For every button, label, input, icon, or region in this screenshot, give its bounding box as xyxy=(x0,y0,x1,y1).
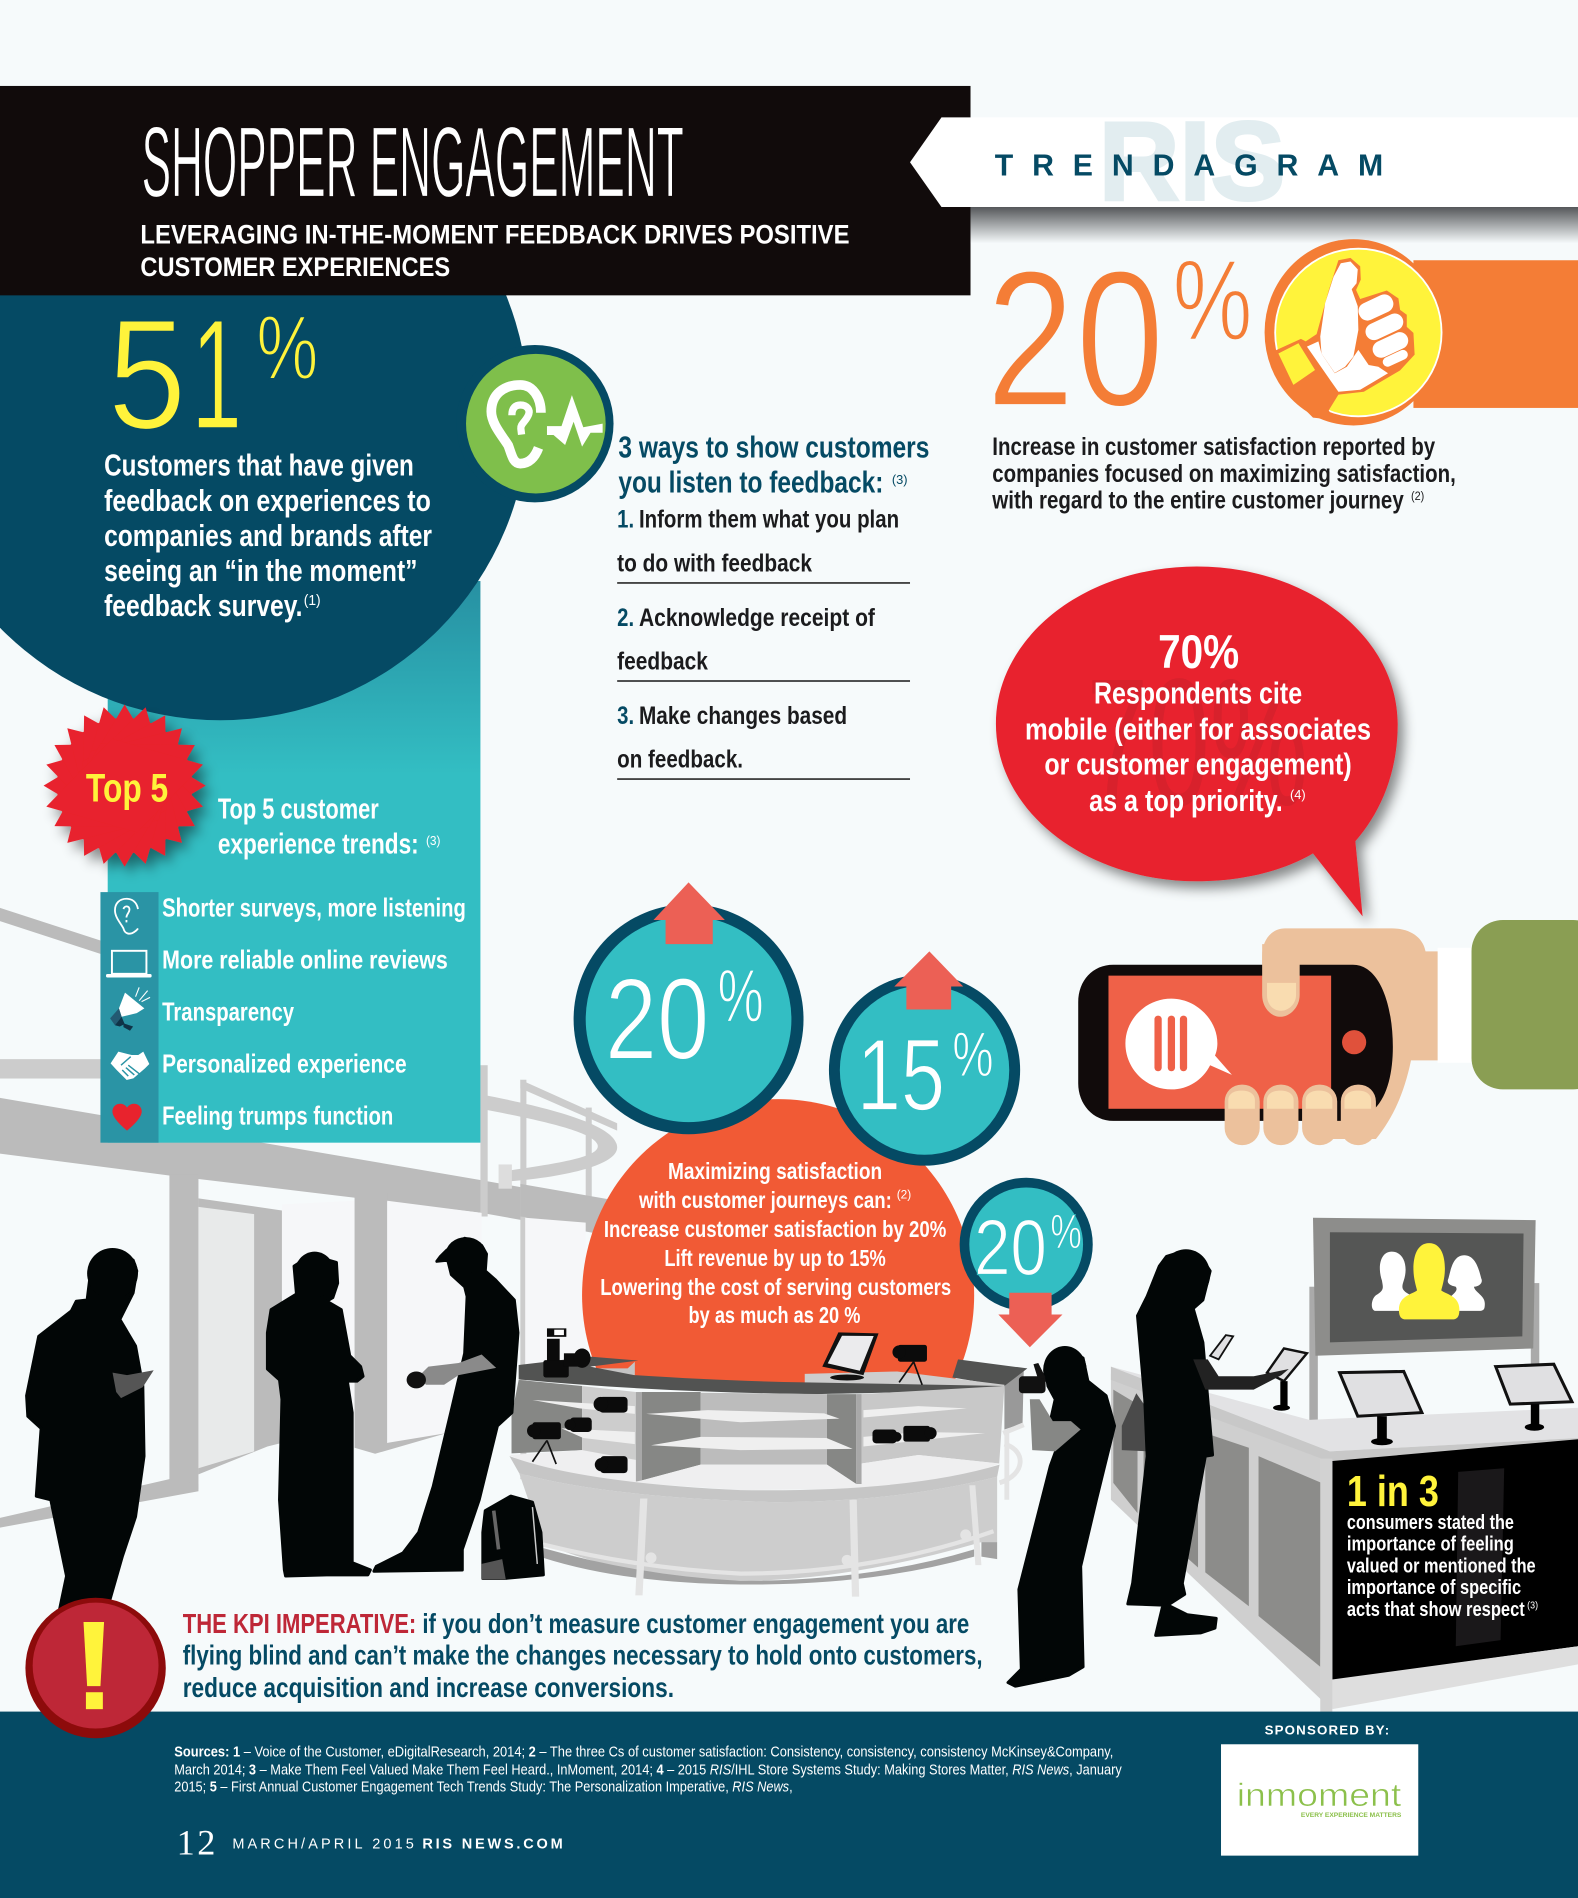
badge: top 5 starburst: Top 5 xyxy=(86,766,168,810)
sponsor xyxy=(1221,1723,1418,1856)
header: black title banner xyxy=(0,86,971,295)
panel: orange maximizing satisfaction: Increase customer satisfaction by 20% xyxy=(604,1216,946,1242)
thumb xyxy=(1262,944,1300,1017)
kiosk: tablet table with sign xyxy=(1111,1218,1578,1719)
icon: thumbs up xyxy=(1265,239,1442,425)
ribbon: trendagram xyxy=(910,99,1578,243)
panel: orange maximizing satisfaction: with customer journeys can: xyxy=(638,1187,892,1213)
silhouette: woman with tablet xyxy=(1122,1249,1289,1635)
panel: orange maximizing satisfaction: Lift revenue by up to 15% xyxy=(664,1245,886,1271)
sign: people icon xyxy=(1313,1218,1536,1356)
page number and date: 12 xyxy=(177,1822,215,1862)
panel: orange maximizing satisfaction: by as much as 20 % xyxy=(689,1302,860,1328)
text: 1 in 3: 1 in 3 xyxy=(1347,1468,1439,1516)
arrow: up xyxy=(894,951,963,1010)
heading: top 5 customer experience trends: experience trends: xyxy=(218,828,419,860)
stat circle: 20 percent down: % xyxy=(1050,1205,1082,1259)
text: 1 in 3 xyxy=(1347,1468,1538,1621)
stat circle: 20 percent down xyxy=(960,1178,1093,1347)
callout: red speech bubble 70 percent: (4) xyxy=(1290,787,1306,802)
text: increase in customer satisfaction: with regard to the entire customer journey xyxy=(991,486,1404,514)
subtitle: CUSTOMER EXPERIENCES xyxy=(140,252,450,282)
list item 2: feedback xyxy=(617,647,709,675)
panel: 51 percent circle xyxy=(0,103,529,720)
list: five trends: Feeling trumps function xyxy=(162,1101,393,1131)
silhouette: man in suit xyxy=(267,1252,370,1576)
stat circle: 20 percent up: 20 xyxy=(605,954,709,1084)
subtitle: LEVERAGING IN-THE-MOMENT FEEDBACK DRIVES POSITIVE xyxy=(140,219,850,249)
header: black title banner: SHOPPER ENGAGEMENT xyxy=(142,107,684,219)
silhouette: photographer xyxy=(1008,1346,1115,1686)
backpack xyxy=(482,1496,543,1580)
text: customers that have given feedback: feedback on experiences to xyxy=(104,485,431,518)
text: customers that have given feedback: (1) xyxy=(304,593,321,609)
stat circle: 15 percent up xyxy=(829,951,1020,1166)
stat: 20 percent with thumbs up: % xyxy=(1173,237,1252,365)
footer band xyxy=(0,1712,1578,1898)
stat: 51%: % xyxy=(257,298,318,399)
list: five trends xyxy=(162,892,466,1131)
list item 1: 1. xyxy=(617,506,634,534)
page number and date: MARCH/APRIL 2015 xyxy=(232,1836,414,1852)
callout: red speech bubble 70 percent xyxy=(996,566,1398,916)
cameras xyxy=(527,1328,937,1473)
list item 3 xyxy=(617,702,910,780)
icon: exclamation alert xyxy=(25,1598,166,1738)
tablets on stands xyxy=(1210,1335,1572,1445)
callout: red speech bubble 70 percent: as a top priority. xyxy=(1089,785,1283,818)
text: customers that have given feedback: Customers that have given xyxy=(104,450,414,483)
icon: handshake xyxy=(111,1052,149,1080)
text: KPI imperative: THE KPI IMPERATIVE: xyxy=(183,1608,416,1639)
heading: top 5 customer experience trends: (3) xyxy=(426,833,440,848)
list item 1: to do with feedback xyxy=(617,549,813,577)
callout: red speech bubble 70 percent: 70% xyxy=(1087,642,1308,844)
icon: laptop xyxy=(106,951,152,977)
silhouette: man with phone xyxy=(27,1248,154,1628)
callout: red speech bubble 70 percent: or customer engagement) xyxy=(1044,749,1352,782)
text: customers that have given feedback: seeing an “in the moment” xyxy=(104,555,417,588)
page number and date: RIS NEWS.COM xyxy=(422,1836,563,1852)
text: KPI imperative: if you don’t measure customer engagement you are xyxy=(422,1608,969,1639)
sources: Sources: 1 – Voice of the Customer, eDigitalResearch, 2014; 2 – The three Cs of customer satisfaction: Consistency, consistency, consistency McKinsey&Company, xyxy=(174,1744,1113,1760)
text: increase in customer satisfaction: (2) xyxy=(1411,489,1424,503)
text: customers that have given feedback: companies and brands after xyxy=(104,520,432,553)
badge: top 5 starburst xyxy=(30,691,219,880)
arrow: up xyxy=(653,882,725,944)
icon: speech bubble xyxy=(1125,999,1232,1089)
text: increase in customer satisfaction xyxy=(991,433,1456,514)
text: increase in customer satisfaction: Increase in customer satisfaction reported by xyxy=(992,433,1435,461)
fingers xyxy=(1225,1085,1376,1145)
text: customers that have given feedback xyxy=(104,450,432,623)
list item 3: Make changes based xyxy=(639,702,847,730)
list item 2 xyxy=(617,604,910,682)
list item 1 xyxy=(617,506,910,584)
text: KPI imperative xyxy=(183,1608,983,1703)
icon: ear and pulse on green circle xyxy=(456,345,614,502)
counter: camera display xyxy=(509,1328,1027,1597)
text: 1 in 3: acts that show respect xyxy=(1347,1599,1525,1621)
panel: orange maximizing satisfaction xyxy=(582,1099,974,1386)
subtitle xyxy=(140,219,850,282)
callout: red speech bubble 70 percent: Respondents cite xyxy=(1094,677,1302,710)
list item 3: on feedback. xyxy=(617,745,743,773)
stat: 51%: 5 xyxy=(108,287,186,463)
icon: megaphone xyxy=(110,987,150,1031)
list: five trends: Shorter surveys, more listening xyxy=(162,892,466,922)
list item 1: Inform them what you plan xyxy=(639,506,899,534)
text: 1 in 3: importance of specific xyxy=(1347,1577,1521,1599)
sources: 2015; 5 – First Annual Customer Engagement Tech Trends Study: The Personalization Imperative, RIS News, xyxy=(174,1779,793,1795)
illustration: hand holding phone xyxy=(1078,920,1578,1145)
list item 3: 3. xyxy=(617,702,634,730)
text: 1 in 3: valued or mentioned the xyxy=(1347,1555,1536,1577)
heading: top 5 customer experience trends: Top 5 customer xyxy=(218,793,379,825)
list item 2: Acknowledge receipt of xyxy=(639,604,875,632)
sponsor: EVERY EXPERIENCE MATTERS xyxy=(1301,1812,1402,1819)
panel: orange maximizing satisfaction: Maximizing satisfaction xyxy=(668,1158,882,1184)
stat circle: 15 percent up: 15 xyxy=(857,1018,945,1132)
text: 1 in 3: consumers stated the xyxy=(1347,1512,1514,1534)
heading: 3 ways: (3) xyxy=(892,472,908,487)
list item 2: 2. xyxy=(617,604,634,632)
page number and date xyxy=(177,1822,563,1862)
heading: 3 ways xyxy=(618,432,929,500)
panel: teal top 5 trends xyxy=(100,581,480,1143)
stat: 20 percent with thumbs up: 2 xyxy=(986,231,1075,448)
stat: 20 percent with thumbs up xyxy=(986,231,1578,514)
ribbon: trendagram: RIS xyxy=(1099,99,1285,224)
text: 1 in 3: (3) xyxy=(1527,1601,1538,1612)
stat circle: 20 percent up: % xyxy=(718,954,764,1038)
silhouette: man with cap xyxy=(374,1237,518,1571)
stat: 51%: 1 xyxy=(191,287,242,463)
list: five trends: Personalized experience xyxy=(162,1048,407,1078)
monitor xyxy=(822,1332,879,1381)
icon: heart xyxy=(112,1104,142,1131)
text: customers that have given feedback: feedback survey. xyxy=(104,590,303,623)
callout: red speech bubble 70 percent: 70% xyxy=(1158,626,1239,679)
text block: 3 ways to show customers xyxy=(617,432,929,780)
callout: red speech bubble 70 percent: mobile (either for associates xyxy=(1025,714,1371,747)
stat: 51% xyxy=(108,287,318,463)
heading: top 5 customer experience trends xyxy=(218,793,440,860)
stat: 20 percent with thumbs up: 0 xyxy=(1076,231,1164,448)
heading: 3 ways: you listen to feedback: xyxy=(618,467,883,500)
text: 1 in 3: importance of feeling xyxy=(1347,1534,1514,1556)
panel: orange maximizing satisfaction: (2) xyxy=(897,1187,911,1201)
background: mall architecture xyxy=(0,908,617,1528)
panel: orange maximizing satisfaction: Lowering the cost of serving customers xyxy=(600,1274,951,1300)
heading: 3 ways: 3 ways to show customers xyxy=(618,432,929,465)
sponsor: SPONSORED BY: xyxy=(1265,1723,1389,1738)
ribbon: trendagram: TRENDAGRAM xyxy=(995,150,1383,183)
arrow: down xyxy=(998,1293,1062,1347)
text: increase in customer satisfaction: companies focused on maximizing satisfaction, xyxy=(992,460,1456,488)
text: KPI imperative: flying blind and can’t make the changes necessary to hold onto customers, xyxy=(183,1639,983,1670)
stat circle: 15 percent up: % xyxy=(952,1020,994,1090)
stat circle: 20 percent down: 20 xyxy=(974,1204,1047,1292)
sources xyxy=(174,1744,1122,1795)
sponsor: inmoment xyxy=(1237,1776,1401,1813)
stat circle: 20 percent up xyxy=(574,882,804,1134)
list: five trends: More reliable online reviews xyxy=(162,944,448,974)
icon: ear xyxy=(115,899,138,934)
sources: March 2014; 3 – Make Them Feel Valued Make Them Feel Heard., InMoment, 2014; 4 – 2015 RIS/IHL Store Systems Study: Making Stores Matter, RIS News, January xyxy=(174,1763,1122,1779)
list: five trends: Transparency xyxy=(162,996,294,1026)
text: KPI imperative: reduce acquisition and increase conversions. xyxy=(183,1672,674,1703)
